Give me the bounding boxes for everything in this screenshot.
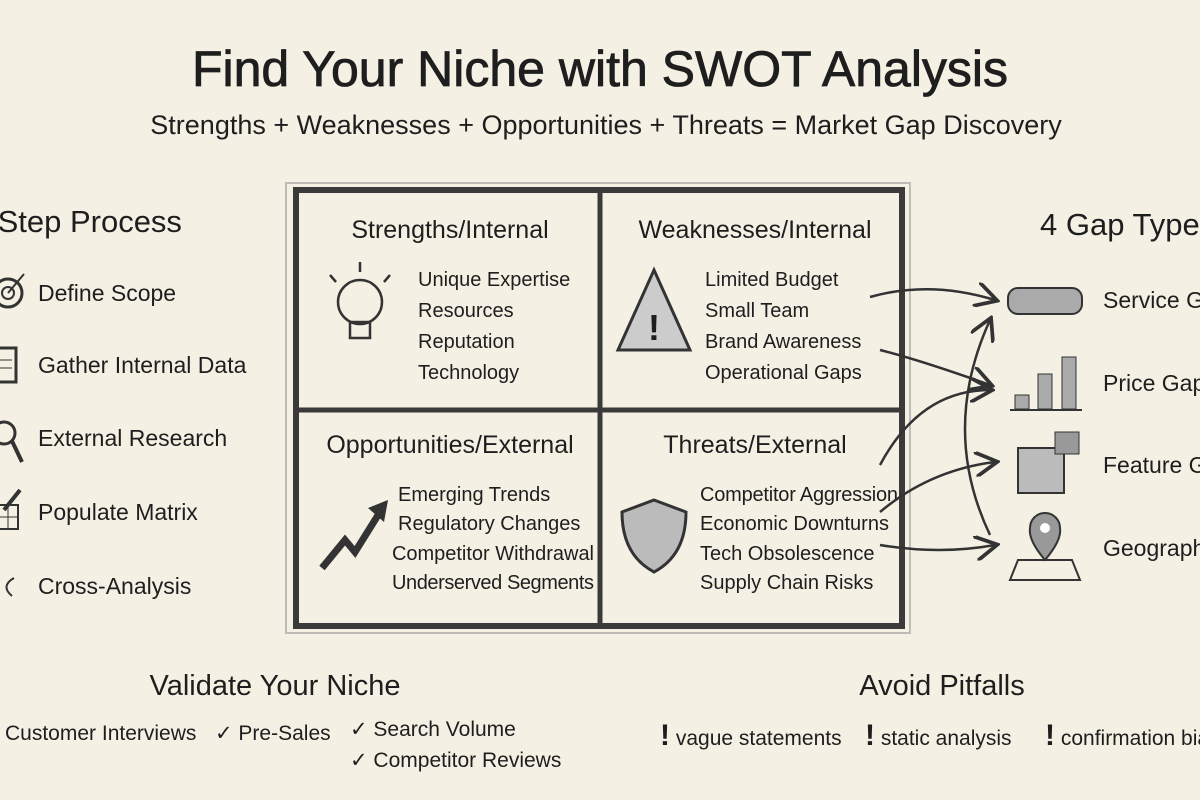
quadrant: opportunities: Regulatory Changes (398, 513, 580, 535)
panel: validate: Customer Interviews (5, 722, 196, 745)
quadrant: strengths: Unique Expertise (418, 269, 570, 291)
icon: warning: ! (648, 307, 660, 348)
icon: warning (618, 270, 690, 350)
quadrant: threats (622, 431, 898, 594)
quadrant: weaknesses (618, 216, 872, 384)
heading: pitfalls: Avoid Pitfalls (859, 670, 1025, 702)
icon: rising arrow (322, 500, 388, 568)
gap: feature (1018, 432, 1200, 493)
quadrant: weaknesses: Brand Awareness (705, 331, 861, 353)
step 5: Cross-Analysis (38, 573, 191, 599)
quadrant: opportunities: Competitor Withdrawal (392, 543, 594, 565)
gap: price (1010, 357, 1200, 410)
quadrant: threats: Competitor Aggression (700, 484, 898, 506)
quadrant: opportunities: Underserved Segments (392, 572, 594, 594)
quadrant: opportunities: Emerging Trends (398, 484, 550, 506)
quadrant: weaknesses: Small Team (705, 300, 809, 322)
arrows: to gap types (870, 289, 995, 550)
quadrant: strengths: Strengths/Internal (351, 216, 549, 244)
quadrant: weaknesses: Operational Gaps (705, 362, 862, 384)
quadrant: threats: Economic Downturns (700, 513, 889, 535)
quadrant: weaknesses: Limited Budget (705, 269, 839, 291)
heading: validate: Validate Your Niche (150, 670, 400, 702)
step 4: Populate Matrix (38, 499, 198, 525)
quadrant: strengths (330, 216, 570, 384)
icon: lightbulb (330, 262, 390, 338)
panel: pitfalls (660, 670, 1200, 752)
subtitle: Strengths + Weaknesses + Opportunities + Threats = Market Gap Discovery (150, 110, 1062, 140)
quadrant: weaknesses: Weaknesses/Internal (638, 216, 872, 244)
panel: validate: ✓ Search Volume (350, 718, 516, 741)
quadrant: opportunities: Opportunities/External (326, 431, 574, 459)
step 1: Define Scope (38, 280, 176, 306)
SWOT matrix (286, 183, 910, 633)
step 2 (0, 348, 247, 382)
quadrant: opportunities (322, 431, 594, 594)
gap: geographic (1010, 513, 1200, 580)
quadrant: threats: Threats/External (663, 431, 847, 459)
panel: pitfalls: ! vague statements (660, 719, 842, 752)
panel: gap types (1008, 207, 1200, 580)
step 3: External Research (38, 425, 227, 451)
step 3 (0, 422, 227, 462)
quadrant: strengths: Resources (418, 300, 514, 322)
quadrant: threats: Supply Chain Risks (700, 572, 873, 594)
step 2: Gather Internal Data (38, 352, 247, 378)
step 1 (0, 274, 176, 307)
quadrant: strengths: Reputation (418, 331, 515, 353)
panel: validate (5, 670, 561, 772)
quadrant: strengths: Technology (418, 362, 519, 384)
gap: service (1008, 287, 1200, 314)
title: Find Your Niche with SWOT Analysis (192, 41, 1008, 97)
quadrant: threats: Tech Obsolescence (700, 543, 875, 565)
panel: pitfalls: ! static analysis (865, 719, 1012, 752)
icon: shield (622, 500, 686, 572)
panel: validate: ✓ Competitor Reviews (350, 749, 561, 772)
step 4 (0, 490, 198, 529)
panel: validate: ✓ Pre-Sales (215, 722, 331, 745)
panel: process steps (0, 204, 247, 599)
